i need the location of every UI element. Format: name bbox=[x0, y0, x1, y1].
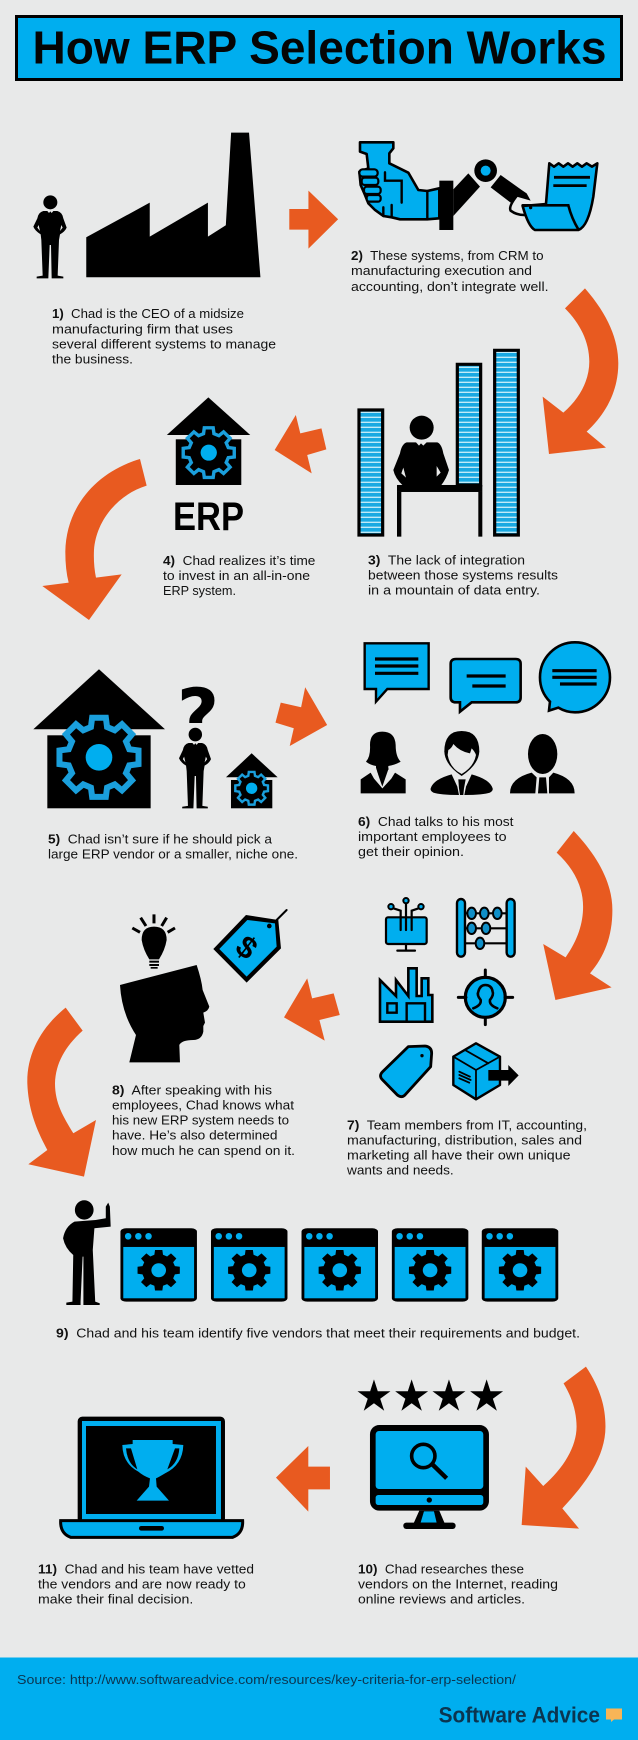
step 1 text: several different systems to manage bbox=[52, 336, 276, 351]
step 4 text: 4) Chad realizes it’s time bbox=[163, 553, 315, 568]
step 10 text bbox=[358, 1561, 558, 1606]
step 7 text: marketing all have their own unique bbox=[347, 1147, 570, 1162]
step 6 text: get their opinion. bbox=[358, 844, 464, 859]
step 8 text: have. He’s also determined bbox=[112, 1127, 278, 1142]
footer band bbox=[0, 1658, 638, 1740]
step 6 text bbox=[358, 814, 514, 859]
step 10 text: 10) Chad researches these bbox=[358, 1561, 524, 1576]
step 6 icon: speech bubbles bbox=[365, 642, 610, 712]
curved arrow: step 6 to 7 bbox=[543, 831, 612, 1000]
step 5 icon: large house, question, small house: ? bbox=[177, 674, 219, 759]
step 8 text: employees, Chad knows what bbox=[112, 1097, 294, 1112]
step 1 text: 1) Chad is the CEO of a midsize bbox=[52, 306, 244, 321]
step 4 icon: ERP house bbox=[167, 397, 250, 485]
arrow: step 7 to 8 bbox=[284, 978, 340, 1041]
step 1 text: manufacturing firm that uses bbox=[52, 321, 234, 336]
step 2 text: 2) These systems, from CRM to bbox=[351, 248, 544, 263]
step 8 text: 8) After speaking with his bbox=[112, 1082, 273, 1097]
step 10 text: online reviews and articles. bbox=[358, 1591, 525, 1606]
step 3 icon: worker at desk between data stacks bbox=[359, 350, 518, 537]
step 3 text: between those systems results bbox=[368, 567, 559, 582]
step 11 icon: laptop with trophy bbox=[61, 1417, 243, 1537]
Software Advice logo: Software Advice bbox=[439, 1702, 600, 1727]
step 8 icon: price tag: $ bbox=[229, 928, 264, 966]
step 7 text bbox=[346, 1117, 587, 1177]
step 7 text: wants and needs. bbox=[346, 1162, 454, 1177]
step 9 text: 9) Chad and his team identify five vendors that meet their requirements and budget. bbox=[56, 1325, 580, 1340]
step 4 text: to invest in an all-in-one bbox=[163, 568, 310, 583]
step 3 text bbox=[368, 552, 559, 597]
step 7 text: 7) Team members from IT, accounting, bbox=[347, 1117, 587, 1132]
step 2 text: manufacturing execution and bbox=[351, 263, 532, 278]
curved arrow: step 9 to 10 bbox=[522, 1367, 605, 1529]
step 7 text: manufacturing, distribution, sales and bbox=[347, 1132, 582, 1147]
title banner: How ERP Selection Works bbox=[32, 22, 606, 74]
step 11 text: make their final decision. bbox=[38, 1591, 193, 1606]
step 8 text: how much he can spend on it. bbox=[112, 1143, 295, 1158]
step 7 icons: department symbols bbox=[380, 898, 519, 1099]
step 10 text: vendors on the Internet, reading bbox=[358, 1576, 558, 1591]
step 6 text: important employees to bbox=[358, 829, 507, 844]
step 3 text: 3) The lack of integration bbox=[368, 552, 525, 567]
arrow: step 1 to 2 bbox=[289, 191, 338, 249]
step 5 text: 5) Chad isn’t sure if he should pick a bbox=[48, 831, 273, 846]
source line: Source: http://www.softwareadvice.com/resources/key-criteria-for-erp-selection/ bbox=[17, 1672, 516, 1687]
step 8 icon: price tag bbox=[213, 910, 287, 983]
step 2 icon: robot arm and disconnected systems bbox=[359, 142, 597, 230]
step 10 icon: four stars and monitor with magnifier bbox=[358, 1379, 503, 1529]
step 11 text: the vendors and are now ready to bbox=[38, 1576, 246, 1591]
step 11 text bbox=[38, 1561, 254, 1606]
step 8 text bbox=[112, 1082, 295, 1158]
step 5 text bbox=[48, 831, 298, 861]
curved arrow: step 2 to 3 bbox=[543, 288, 618, 454]
step 3 text: in a mountain of data entry. bbox=[368, 582, 540, 597]
curved arrow: step 8 to 9 bbox=[27, 1008, 96, 1177]
step 2 text bbox=[351, 248, 548, 294]
curved arrow: step 4 to 5 bbox=[42, 459, 147, 620]
step 6 text: 6) Chad talks to his most bbox=[358, 814, 514, 829]
step 5 icon: large house, question, small house bbox=[33, 669, 278, 808]
step 8 icon: head with lightbulb bbox=[120, 914, 209, 1062]
step 4 text: ERP system. bbox=[163, 583, 236, 598]
ERP label: ERP bbox=[173, 495, 244, 539]
step 11 text: 11) Chad and his team have vetted bbox=[38, 1561, 254, 1576]
step 9 icon: Chad pointing at five vendor windows bbox=[63, 1200, 558, 1305]
arrow: step 10 to 11 bbox=[276, 1446, 330, 1512]
step 5 text: large ERP vendor or a smaller, niche one. bbox=[48, 846, 298, 861]
step 1 text bbox=[52, 306, 276, 366]
step 1 text: the business. bbox=[52, 351, 133, 366]
step 1 icon: CEO and factory bbox=[33, 133, 260, 278]
step 4 text bbox=[163, 553, 315, 598]
step 2 text: accounting, don’t integrate well. bbox=[351, 279, 548, 294]
arrow: step 3 to 4 bbox=[275, 415, 326, 473]
step 6 icon: three employees bbox=[361, 731, 575, 795]
step 8 text: his new ERP system needs to bbox=[112, 1112, 289, 1127]
arrow: step 5 to 6 bbox=[275, 687, 327, 746]
